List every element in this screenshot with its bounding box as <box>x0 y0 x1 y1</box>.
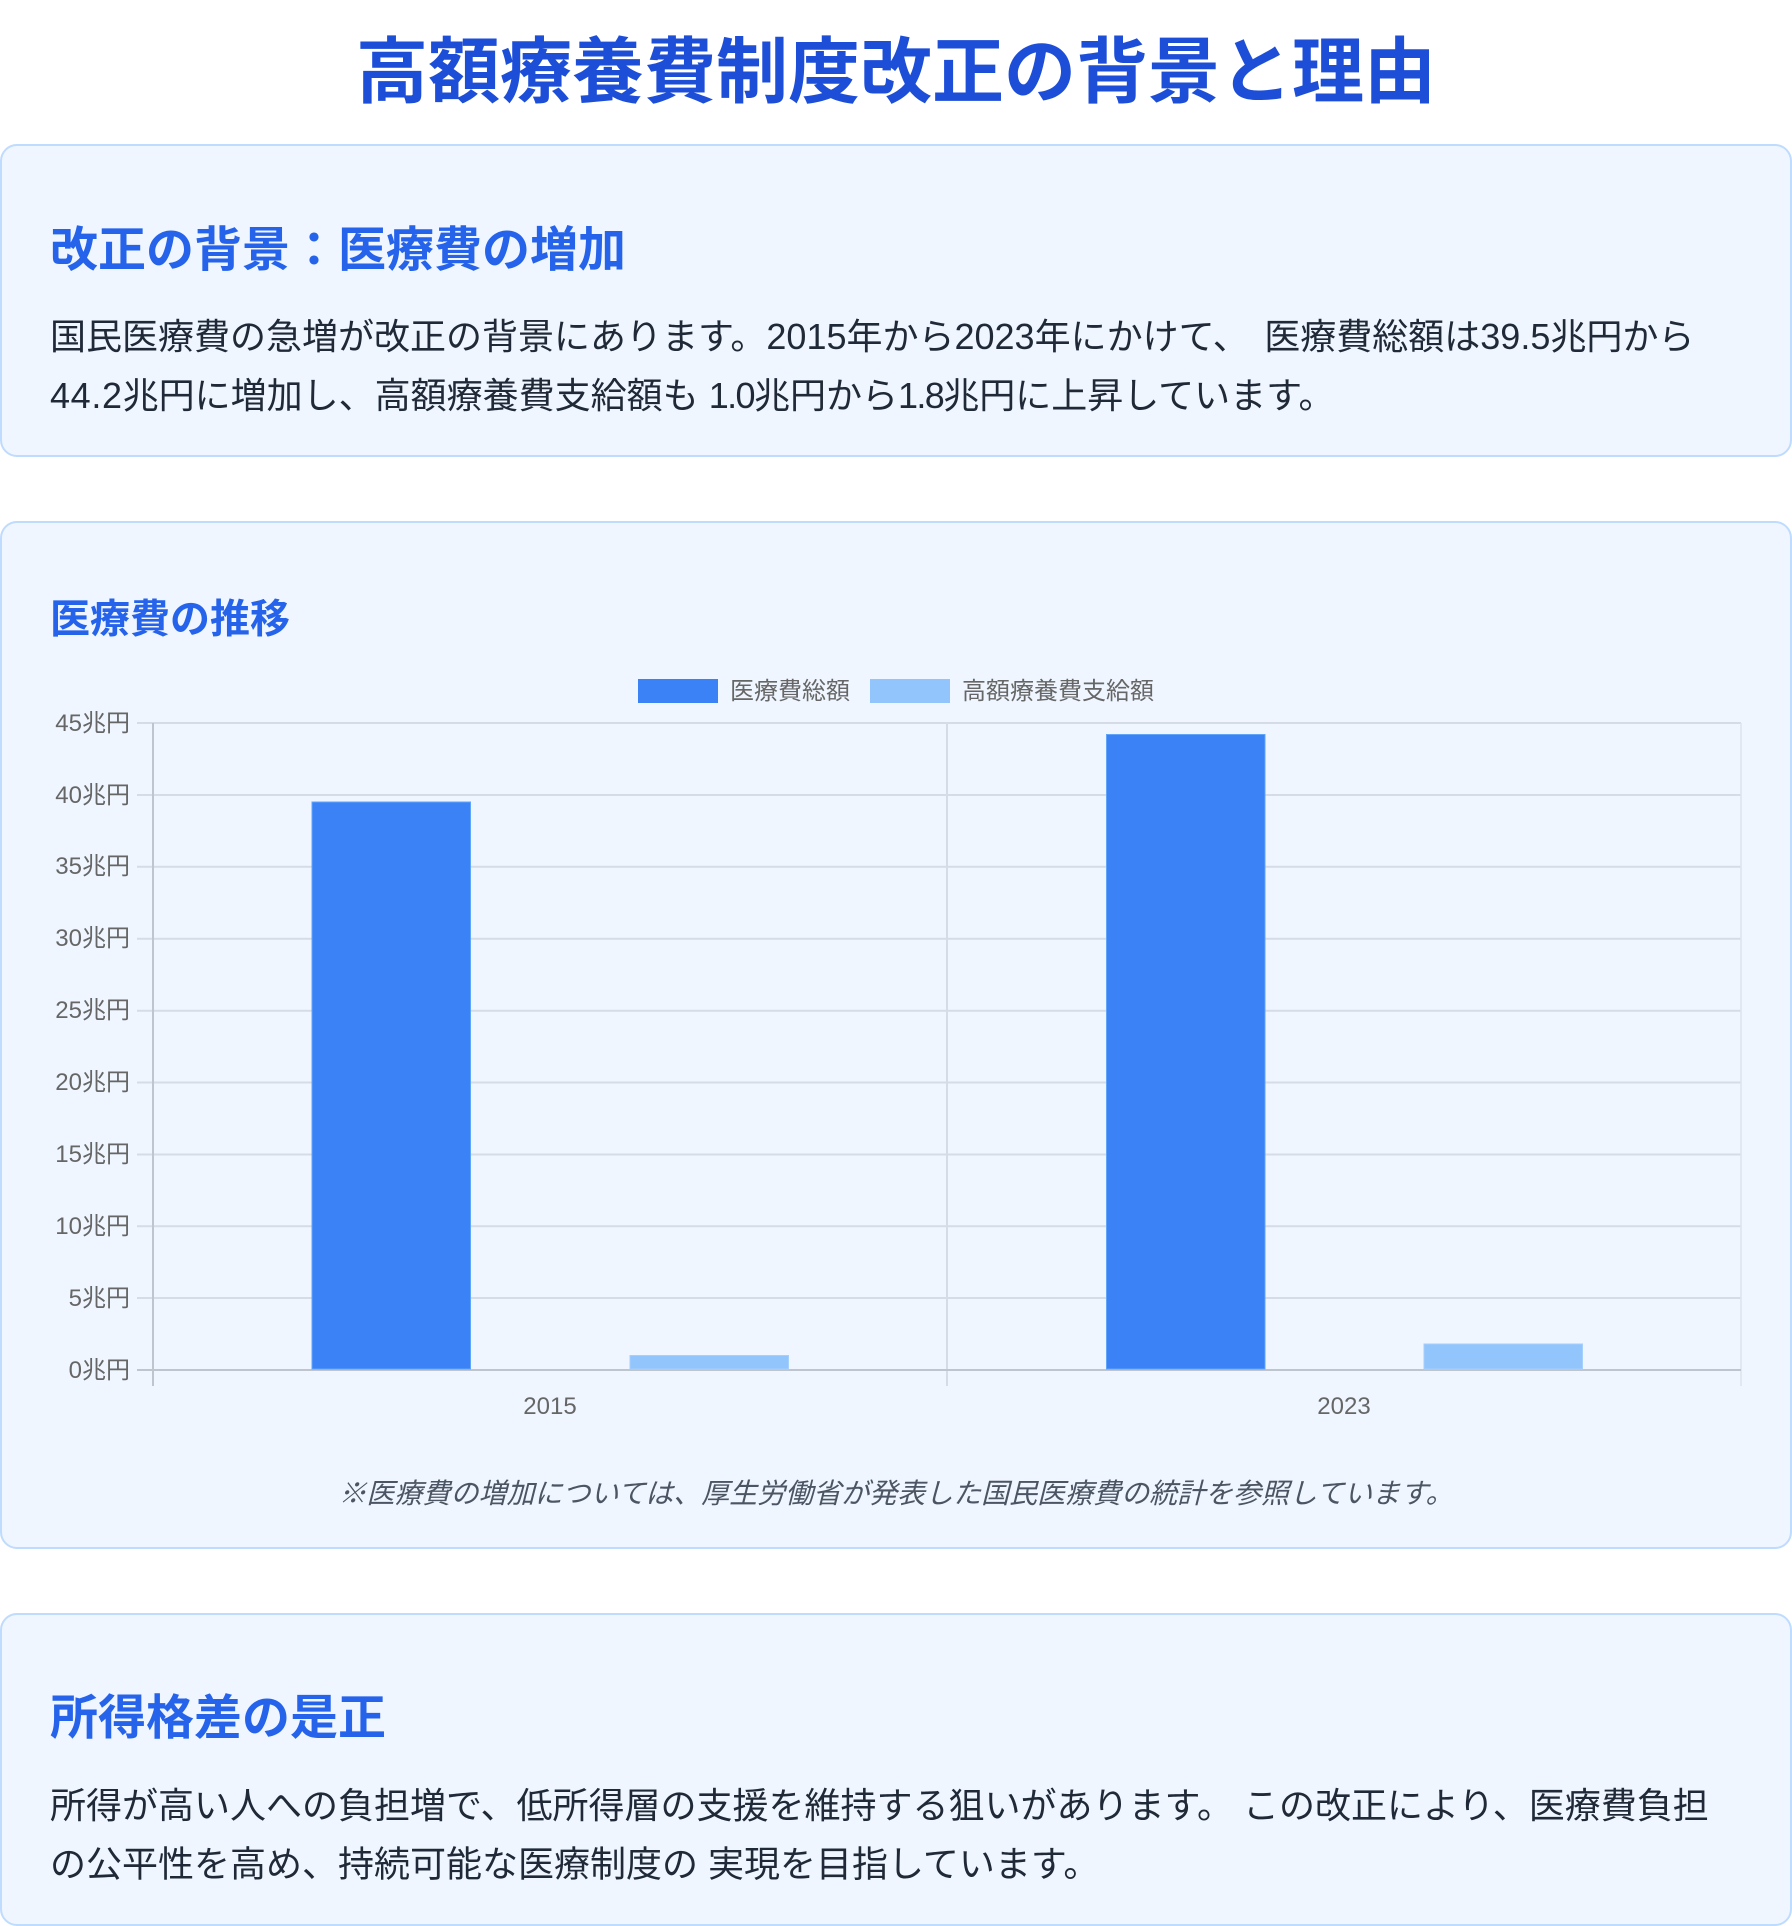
text block: income disparity description: 所得が高い人への負担増で、低所得層の支援を維持する狙いがあります。 この改正により、医療費負担 <box>50 1785 1709 1826</box>
y axis labels: 15兆円 <box>55 1141 130 1168</box>
heading: background: 改正の背景：医療費の増加 <box>50 224 626 277</box>
y axis labels: 25兆円 <box>55 997 130 1024</box>
panel: medical cost trend <box>1 522 1791 1548</box>
text block: income disparity description: の公平性を高め、持続可能な医療制度の 実現を目指しています。 <box>50 1844 1099 1884</box>
y axis labels: 40兆円 <box>55 782 130 809</box>
bars: 2023 high-cost benefit <box>1424 1344 1582 1369</box>
source note: ※医療費の増加については、厚生労働省が発表した国民医療費の統計を参照しています。 <box>339 1478 1453 1509</box>
legend: 高額療養費支給額 <box>962 678 1154 705</box>
text block: background description <box>50 316 1694 416</box>
bar chart <box>55 710 1741 1420</box>
heading: income disparity: 所得格差の是正 <box>50 1692 386 1745</box>
y axis labels: 20兆円 <box>55 1069 130 1096</box>
title: 高額療養費制度改正の背景と理由 <box>356 33 1436 113</box>
x axis labels: 2015 <box>523 1393 577 1420</box>
y axis labels: 0兆円 <box>69 1357 130 1384</box>
text block: background description: 国民医療費の急増が改正の背景にあります。2015年から2023年にかけて、 医療費総額は39.5兆円から <box>50 316 1694 357</box>
x axis labels: 2023 <box>1317 1393 1371 1420</box>
x axis labels <box>523 1393 1371 1420</box>
y axis labels <box>55 710 130 1384</box>
heading: trend: 医療費の推移 <box>50 598 290 642</box>
y axis labels: 10兆円 <box>55 1213 130 1240</box>
text block: background description: 44.2兆円に増加し、高額療養費支給額も 1.0兆円から1.8兆円に上昇しています。 <box>50 375 1335 416</box>
y axis labels: 30兆円 <box>55 925 130 952</box>
bars: 2015 high-cost benefit <box>630 1356 788 1369</box>
text block: income disparity description <box>50 1785 1709 1884</box>
bars: 2015 total cost <box>312 802 470 1369</box>
y axis labels: 45兆円 <box>55 710 130 737</box>
y axis labels: 35兆円 <box>55 853 130 880</box>
bars: 2023 total cost <box>1106 734 1265 1369</box>
legend: 医療費総額 <box>730 678 850 705</box>
y axis labels: 5兆円 <box>69 1285 130 1312</box>
panel: background of the revision <box>1 145 1791 456</box>
panel: correcting income disparity <box>1 1614 1791 1925</box>
legend <box>638 678 1154 705</box>
